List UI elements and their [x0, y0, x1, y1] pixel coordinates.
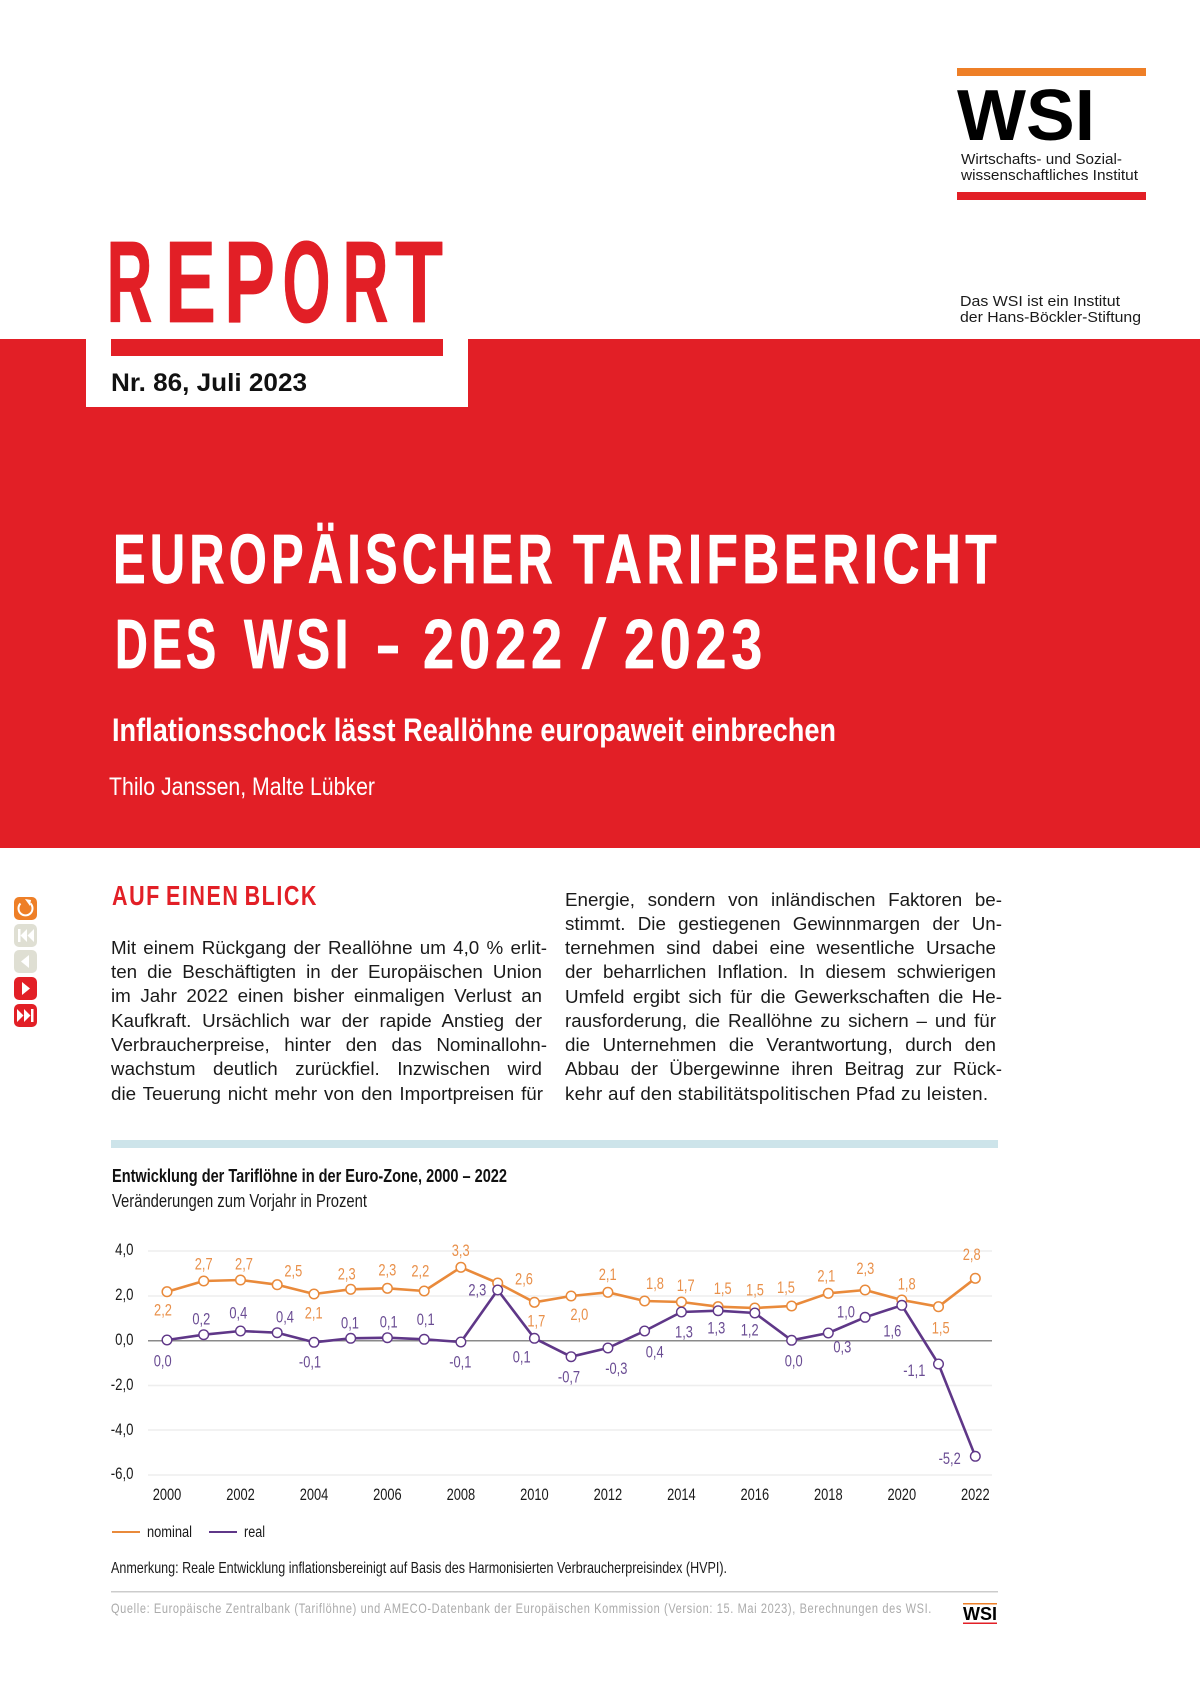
legend: nominal	[147, 1524, 192, 1541]
real value labels: 0,3	[833, 1339, 851, 1357]
y axis labels: 0,0	[115, 1331, 134, 1349]
real value labels: 0,4	[276, 1309, 294, 1327]
x axis labels: 2002	[226, 1487, 255, 1504]
navigation icons	[14, 897, 37, 1027]
real value labels: -5,2	[939, 1451, 961, 1468]
real value labels: 0,2	[192, 1311, 210, 1329]
report heading: R	[342, 217, 388, 347]
real value labels	[154, 1282, 961, 1468]
x axis labels: 2018	[814, 1487, 843, 1504]
real value labels: 0,1	[513, 1349, 531, 1367]
chart subtitle: Veränderungen zum Vorjahr in Prozent	[112, 1191, 367, 1211]
real value labels: -0,7	[558, 1369, 580, 1387]
nominal value labels: 2,8	[963, 1247, 981, 1264]
report tab: Nr. 86, Juli 2023	[111, 369, 307, 397]
nominal value labels: 2,1	[599, 1267, 617, 1284]
icon: first page	[14, 924, 37, 947]
x axis labels: 2010	[520, 1487, 549, 1504]
nominal value labels	[154, 1243, 981, 1338]
y axis labels: 2,0	[115, 1286, 134, 1304]
x axis labels: 2014	[667, 1487, 696, 1504]
main title: EUROPÄISCHER	[113, 520, 557, 598]
series: real	[162, 1285, 980, 1461]
legend	[112, 1524, 265, 1541]
WSI logo: Wirtschafts- und Sozial-	[961, 152, 1122, 168]
nominal value labels: 2,3	[338, 1266, 356, 1284]
report heading: T	[395, 217, 443, 347]
x axis labels: 2000	[153, 1487, 181, 1504]
nominal value labels: 2,2	[154, 1302, 172, 1320]
nominal value labels: 1,5	[932, 1320, 950, 1338]
x axis labels: 2016	[740, 1487, 769, 1504]
nominal value labels: 2,6	[515, 1271, 533, 1289]
institute note: Das WSI ist ein Institut	[960, 293, 1121, 310]
nominal value labels: 1,5	[714, 1281, 732, 1298]
real value labels: 2,3	[468, 1282, 486, 1300]
nominal value labels: 1,8	[898, 1276, 916, 1294]
y axis labels: -4,0	[111, 1421, 134, 1439]
nominal value labels: 2,7	[235, 1256, 253, 1274]
real value labels: 1,3	[675, 1324, 693, 1342]
real value labels: 1,2	[741, 1322, 759, 1340]
WSI logo: wissenschaftliches Institut	[960, 168, 1138, 184]
main title: WSI	[244, 605, 353, 683]
nominal value labels: 3,3	[452, 1243, 470, 1260]
section heading: AUF EINEN BLICK	[112, 880, 318, 911]
legend: real	[244, 1524, 265, 1541]
x axis labels: 2008	[447, 1487, 475, 1504]
subtitle: Inflationsschock lässt Reallöhne europaweit einbrechen	[112, 712, 836, 748]
y axis labels: -2,0	[111, 1376, 134, 1394]
icon: reload	[14, 897, 37, 920]
x axis labels: 2022	[961, 1487, 990, 1504]
y axis labels: -6,0	[111, 1465, 134, 1483]
main title: TARIFBERICHT	[573, 520, 1001, 598]
x axis labels: 2006	[373, 1487, 402, 1504]
nominal value labels: 2,1	[305, 1305, 323, 1323]
y axis labels: 4,0	[115, 1241, 134, 1259]
report heading: P	[224, 217, 275, 347]
real value labels: 0,0	[785, 1353, 803, 1371]
WSI logo: WSI	[957, 76, 1095, 156]
small WSI logo: WSI	[963, 1604, 997, 1624]
series: nominal	[162, 1262, 980, 1313]
x axis labels: 2004	[300, 1487, 328, 1504]
nominal value labels: 2,0	[570, 1307, 588, 1324]
nominal value labels: 1,7	[527, 1313, 545, 1331]
chart title: Entwicklung der Tariflöhne in der Euro-Zone, 2000 – 2022	[112, 1166, 507, 1186]
x axis labels	[153, 1487, 990, 1504]
real value labels: 0,4	[646, 1344, 664, 1362]
real value labels: 0,1	[417, 1312, 435, 1329]
WSI logo	[957, 68, 1146, 200]
chart note: Anmerkung: Reale Entwicklung inflationsbereinigt auf Basis des Harmonisierten Verbraucherpreisindex (HVPI).	[111, 1560, 727, 1577]
nominal value labels: 2,3	[378, 1262, 396, 1280]
main title: –	[377, 605, 399, 683]
real value labels: 0,4	[229, 1305, 247, 1323]
real value labels: -0,1	[449, 1354, 471, 1372]
institute note: der Hans-Böckler-Stiftung	[960, 309, 1141, 326]
nominal value labels: 1,5	[746, 1282, 764, 1300]
real value labels: 1,3	[707, 1320, 725, 1338]
report heading: E	[165, 217, 216, 347]
main title	[113, 520, 1001, 683]
real value labels: 0,1	[341, 1315, 359, 1333]
text block: summary right column	[565, 890, 1002, 1104]
x axis labels: 2020	[887, 1487, 916, 1504]
line chart	[111, 1241, 992, 1504]
report heading	[106, 217, 443, 347]
main title: /	[582, 605, 607, 683]
red title band	[0, 339, 1200, 848]
nominal value labels: 2,3	[856, 1261, 874, 1278]
nominal value labels: 2,1	[817, 1268, 835, 1286]
text block: summary left column	[111, 938, 547, 1104]
icon: previous page	[14, 950, 37, 973]
real value labels: 1,6	[883, 1323, 901, 1341]
icon: next page	[14, 977, 37, 1000]
nominal value labels: 2,7	[195, 1256, 213, 1274]
chart top divider	[111, 1140, 998, 1148]
real value labels: -1,1	[903, 1363, 925, 1380]
main title: DES	[115, 605, 220, 683]
icon: last page	[14, 1004, 37, 1027]
report heading: O	[282, 217, 330, 347]
source rule	[111, 1591, 998, 1592]
report heading: R	[106, 217, 152, 347]
x axis labels: 2012	[594, 1487, 622, 1504]
real value labels: -0,1	[299, 1354, 321, 1372]
nominal value labels: 1,7	[677, 1278, 695, 1295]
nominal value labels: 2,5	[284, 1263, 302, 1281]
report tab	[86, 339, 468, 407]
source line: Quelle: Europäische Zentralbank (Tariflöhne) und AMECO-Datenbank der Europäischen Kommission (Version: 15. Mai 2023), Berechnungen des WSI.	[111, 1600, 932, 1616]
real value labels: 0,0	[154, 1353, 172, 1371]
main title: 2022	[423, 605, 567, 683]
main title: 2023	[624, 605, 767, 683]
y axis labels	[111, 1241, 134, 1483]
real value labels: -0,3	[605, 1361, 627, 1378]
institute note	[960, 293, 1141, 326]
nominal value labels: 1,8	[646, 1276, 664, 1293]
nominal value labels: 2,2	[411, 1263, 429, 1281]
real value labels: 1,0	[837, 1304, 855, 1322]
real value labels: 0,1	[380, 1314, 398, 1332]
nominal value labels: 1,5	[777, 1280, 795, 1297]
authors: Thilo Janssen, Malte Lübker	[109, 773, 375, 801]
